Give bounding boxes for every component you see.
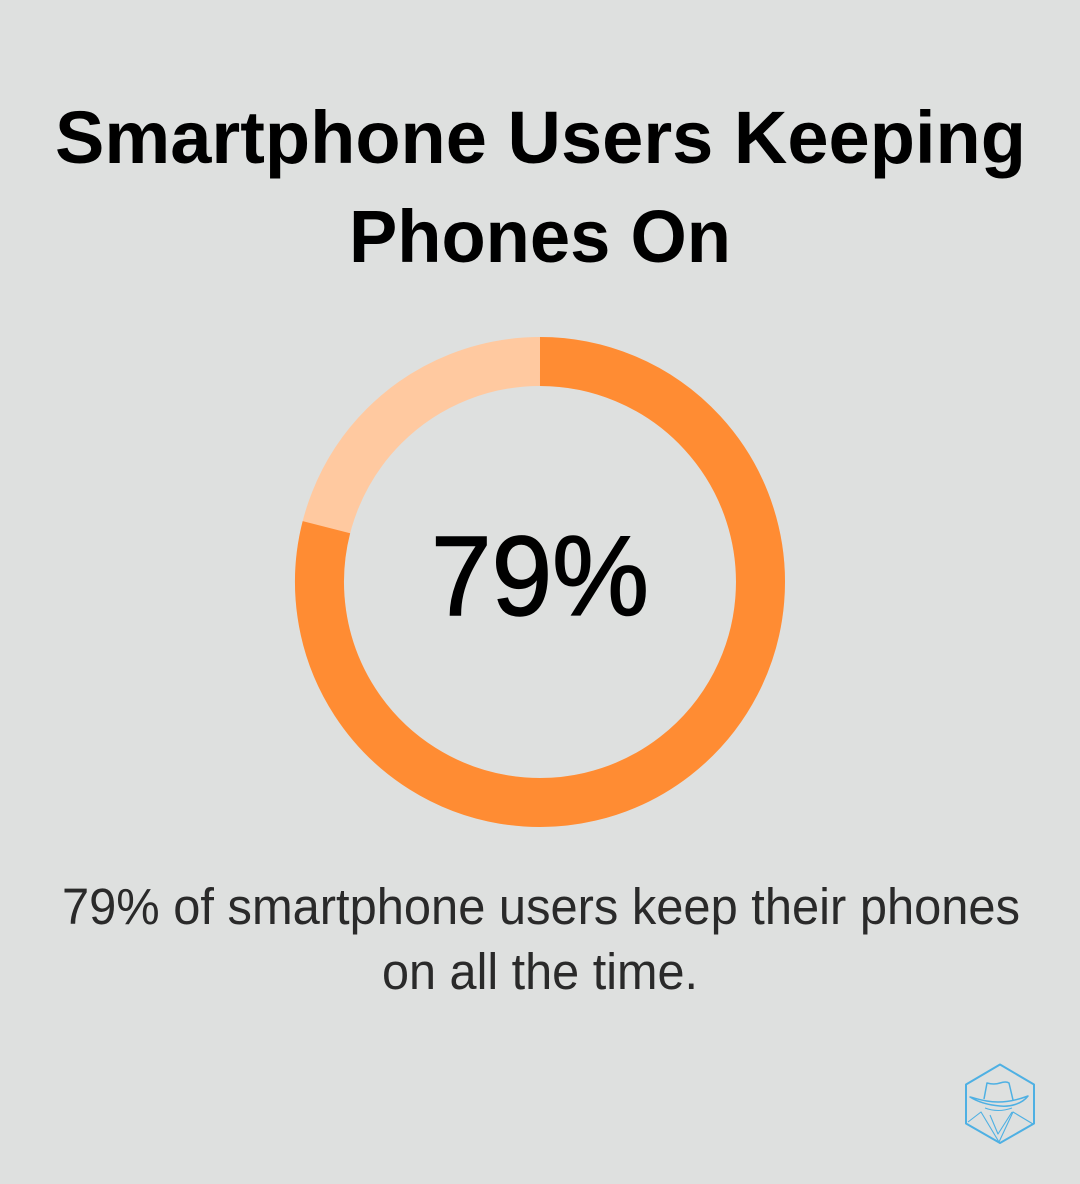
title: [55, 96, 1026, 278]
caption text: [62, 878, 1020, 1000]
icon: hat: [970, 1082, 1028, 1106]
donut centre value: 79%: [431, 513, 649, 639]
title: Phones On: [349, 195, 731, 278]
donut chart: 79%: [319, 362, 760, 802]
donut track: remaining 21%: [320, 362, 760, 802]
title: Smartphone Users Keeping: [55, 96, 1026, 179]
caption text: 79% of smartphone users keep their phones: [62, 878, 1020, 935]
icon: face shadow and collar: [968, 1108, 1033, 1142]
caption text: on all the time.: [382, 943, 698, 1000]
icon: hexagon outline: [966, 1064, 1034, 1143]
icon: spy logo in hexagon: [966, 1064, 1034, 1143]
donut value arc: 79%: [319, 362, 760, 802]
